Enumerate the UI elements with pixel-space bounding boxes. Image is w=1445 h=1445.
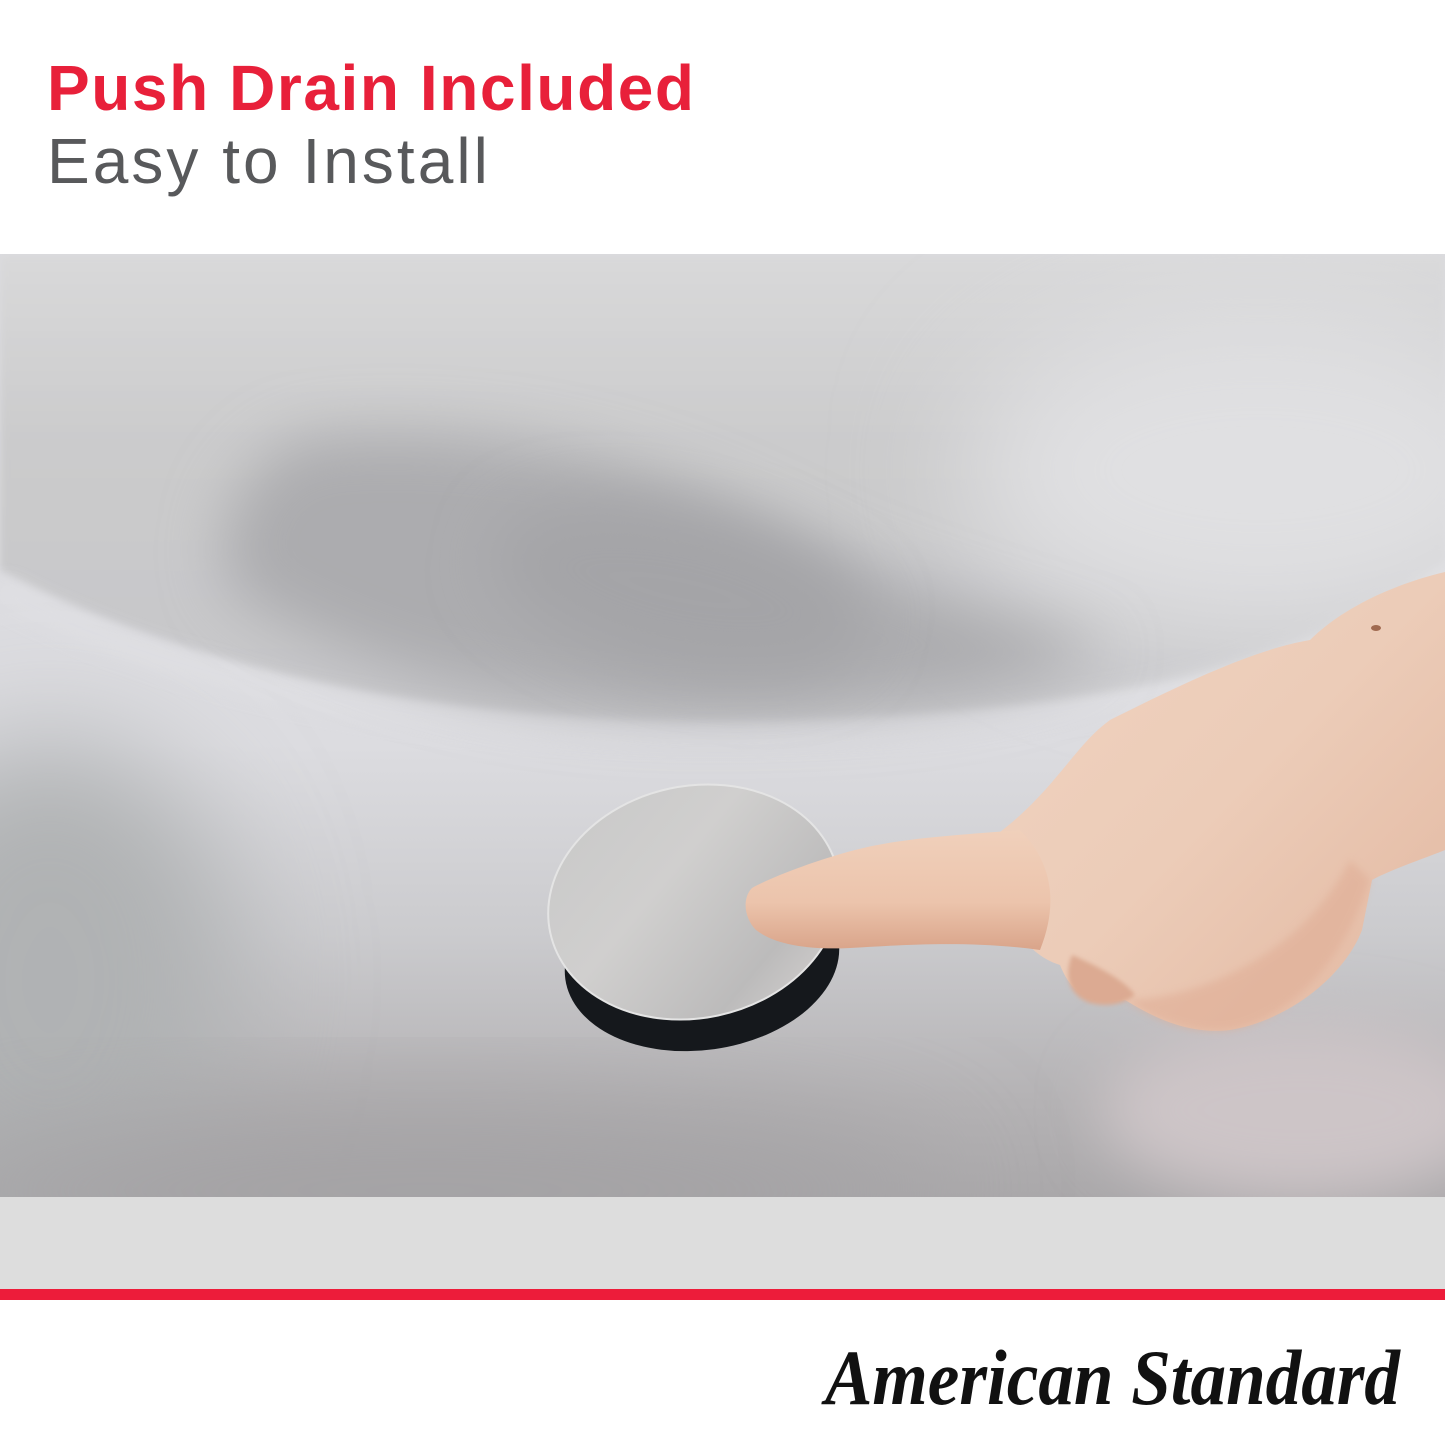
- sink photo illustration: [0, 254, 1445, 1300]
- basin upper back wall: [0, 284, 1333, 720]
- basin left shading: [0, 698, 263, 1066]
- hand: [746, 572, 1445, 1031]
- heading: Push Drain Included: Push Drain Included: [47, 52, 696, 124]
- bowl shadow: [224, 435, 1110, 712]
- curled finger: [1068, 955, 1135, 1005]
- top right lighter wall: [960, 300, 1445, 640]
- index finger: [746, 830, 1050, 950]
- subheading: Easy to Install: Easy to Install: [47, 125, 491, 197]
- countertop: [0, 1197, 1445, 1289]
- basin lower shading: [24, 1108, 681, 1197]
- palm: [998, 572, 1445, 1031]
- basin right warm reflection: [1100, 1020, 1445, 1200]
- wrist mark: [1371, 625, 1381, 631]
- drain base: [564, 948, 840, 1052]
- dark shadow core: [680, 510, 829, 603]
- basin floor: [0, 254, 1445, 1197]
- hand crease shading: [1125, 860, 1370, 1031]
- red divider bar: [0, 1289, 1445, 1300]
- rim highlight: [0, 570, 1445, 732]
- logo: American Standard: American Standard: [820, 1334, 1401, 1421]
- drain cap: [547, 784, 834, 1020]
